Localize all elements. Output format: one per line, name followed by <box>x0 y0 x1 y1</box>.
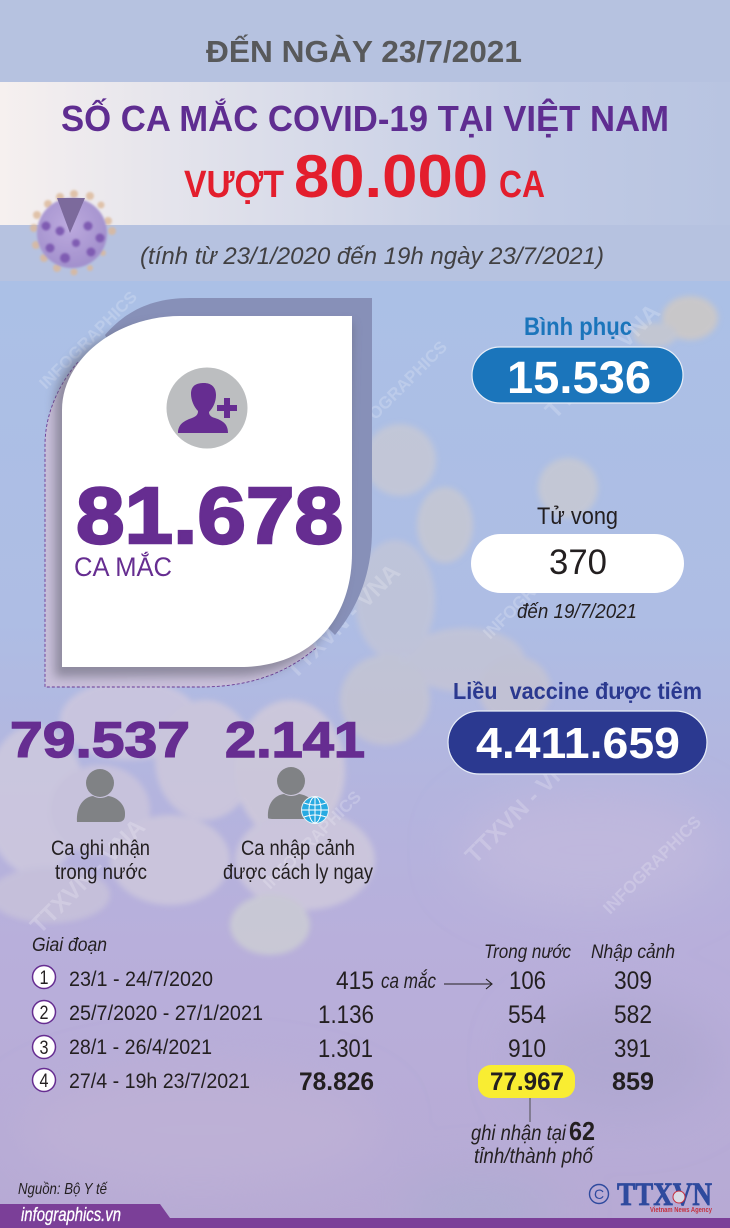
stat: imported cases <box>223 712 373 884</box>
row 3: 3 <box>40 1038 48 1059</box>
row 4: 4 <box>40 1071 49 1092</box>
watermarks: TTXVN - VNA <box>280 559 406 684</box>
row 4: 78.826 <box>299 1068 374 1096</box>
logo: TTXVN: TTXVN <box>617 1177 712 1213</box>
row 1: 309 <box>614 967 652 995</box>
callout: provinces <box>471 1098 595 1168</box>
title <box>61 97 669 210</box>
stat: domestic cases: Ca ghi nhận <box>51 837 150 860</box>
row 1: 106 <box>509 967 546 995</box>
logo: TTXVN: Vietnam News Agency <box>650 1207 712 1214</box>
stat: vaccine doses <box>448 678 707 774</box>
stat: domestic cases <box>10 712 190 884</box>
stat: recovered <box>472 313 683 403</box>
row 1: 23/1 - 24/7/2020 <box>69 968 213 991</box>
stat: deaths: Tử vong <box>537 503 618 530</box>
icon: virus <box>30 190 116 276</box>
footer bar: infographics.vn <box>21 1205 121 1226</box>
table: phases: Giai đoạn <box>32 935 107 956</box>
title: SỐ CA MẮC COVID-19 TẠI VIỆT NAM <box>61 97 669 139</box>
row 3: 1.301 <box>318 1035 373 1063</box>
table: phases: Trong nước <box>484 942 571 963</box>
subtitle: (tính từ 23/1/2020 đến 19h ngày 23/7/2021) <box>140 243 604 270</box>
row 4 <box>32 1065 654 1098</box>
stat: imported cases: 2.141 <box>225 712 365 768</box>
watermarks: INFOGRAPHICS <box>479 537 585 643</box>
row 1: 415 <box>336 967 374 995</box>
stat: recovered: 15.536 <box>507 352 651 403</box>
watermarks: TTXVN - VNA <box>540 299 666 424</box>
icon: person <box>77 769 125 822</box>
watermarks: INFOGRAPHICS <box>345 337 451 443</box>
watermarks: INFOGRAPHICS <box>35 287 141 393</box>
row 4: 859 <box>612 1068 654 1096</box>
stat: domestic cases: 79.537 <box>10 712 190 768</box>
stat: imported cases: Ca nhập cảnh <box>241 837 355 860</box>
stat: recovered: Bình phục <box>524 313 632 341</box>
watermarks: TTXVN - VNA <box>25 814 151 939</box>
stat: vaccine doses: 4.411.659 <box>476 719 680 768</box>
callout: provinces: tỉnh/thành phố <box>474 1145 595 1168</box>
row 2: 1.136 <box>318 1001 374 1029</box>
stat: deaths: 370 <box>549 543 607 582</box>
callout: provinces: ghi nhận tại <box>471 1122 567 1145</box>
total cases label: CA MẮC <box>74 551 172 582</box>
watermarks: INFOGRAPHICS <box>599 812 705 918</box>
source: Nguồn: Bộ Y tế <box>18 1181 108 1198</box>
callout: provinces: 62 <box>569 1116 595 1146</box>
row 1 <box>32 966 652 995</box>
watermarks: TTXVN - VNA <box>460 744 586 869</box>
row 3: 391 <box>614 1035 651 1063</box>
row 3: 910 <box>508 1035 546 1063</box>
heading: date: ĐẾN NGÀY 23/7/2021 <box>206 34 522 69</box>
row 3: 28/1 - 26/4/2021 <box>69 1036 212 1059</box>
icon: person with globe <box>268 767 328 824</box>
title band <box>0 82 730 225</box>
row 4: 77.967 <box>490 1068 564 1096</box>
stat: deaths <box>471 503 684 623</box>
row 3 <box>32 1035 651 1063</box>
table: phases <box>32 935 675 1098</box>
panel: total cases card <box>45 298 372 687</box>
logo: TTXVN: C <box>594 1186 604 1202</box>
row 2 <box>32 1000 652 1029</box>
stat: domestic cases: trong nước <box>55 861 147 884</box>
stat: vaccine doses: Liều vaccine được tiêm <box>453 678 702 704</box>
title: CA <box>499 164 545 206</box>
row 1: 1 <box>40 968 48 989</box>
title: VƯỢT <box>184 164 284 206</box>
row 4: 27/4 - 19h 23/7/2021 <box>69 1070 250 1093</box>
row 1: ca mắc <box>381 970 436 993</box>
title: 80.000 <box>294 143 488 210</box>
total cases number: 81.678 <box>76 471 343 560</box>
stat: imported cases: được cách ly ngay <box>223 861 373 884</box>
footer bar <box>0 1204 730 1228</box>
watermarks <box>25 287 705 939</box>
watermarks: INFOGRAPHICS <box>259 787 365 893</box>
row 2: 554 <box>508 1001 546 1029</box>
stat: deaths: đến 19/7/2021 <box>517 601 637 623</box>
row 2: 582 <box>614 1001 652 1029</box>
row 2: 25/7/2020 - 27/1/2021 <box>69 1002 263 1025</box>
row 2: 2 <box>40 1003 48 1024</box>
table: phases: Nhập cảnh <box>591 942 675 963</box>
icon: person plus <box>166 368 248 448</box>
logo: TTXVN <box>590 1177 712 1214</box>
